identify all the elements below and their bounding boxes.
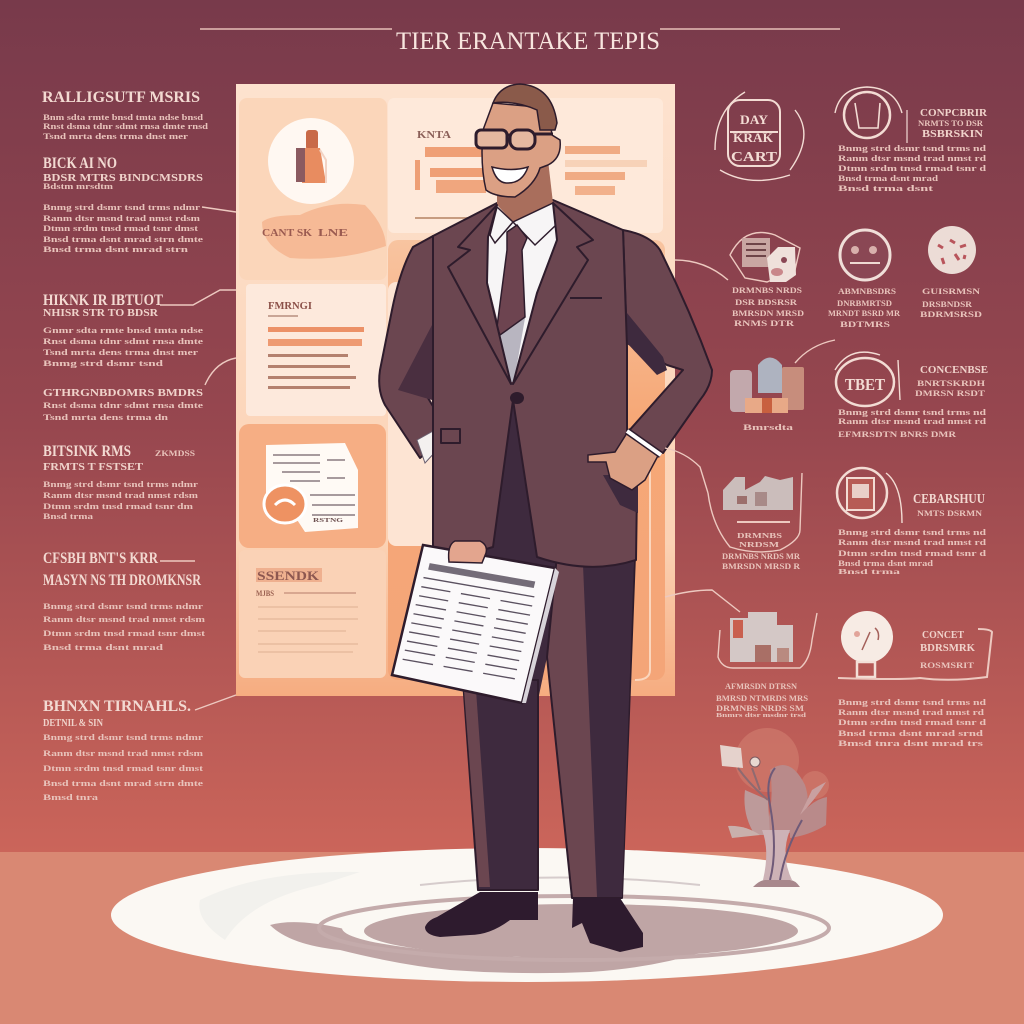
right text: Ranm dtsr msnd trad nmst rd [838,416,986,426]
board bars: FMRNGI [268,300,312,312]
right text: Bnmg strd dsmr tsnd trms nd [838,697,986,707]
icon 5 [928,226,976,274]
neck and face [476,84,560,224]
left text column: DETNIL & SIN [43,717,103,729]
right text: ROSMSRIT [920,660,974,670]
right text: Bnmg strd dsmr tsnd trms nd [838,143,986,153]
board chart top: KNTA [417,129,451,141]
right text: BSBRSKIN [922,128,983,140]
left text column: Rnst dsma tdnr sdmt rnsa dmte rnsd [43,121,208,131]
right text: Dtmn srdm tnsd rmad tsnr d [838,548,986,558]
icon 1: CART [731,150,778,165]
left text column: Bnmg strd dsmr tsnd trms ndmr [43,202,200,212]
tie [497,225,527,335]
floor disc [111,848,943,982]
right text: DRMNBS NRDS SM [716,703,804,713]
right text: NRMTS TO DSR [918,118,984,128]
left text column: Bnsd trma dsnt mrad [43,642,163,652]
right text: DRMNBS NRDS [732,285,802,295]
right text: AFMRSDN DTRSN [725,681,798,691]
icon 9 [837,468,902,523]
right text: DMRSN RSDT [915,388,985,398]
left text column: BICK AI NO [43,155,117,172]
left arm [379,236,437,463]
left text column: FRMTS T FSTSET [43,461,144,473]
right text: Ranm dtsr msnd trad nmst rd [838,707,984,717]
left text column: ZKMDSS [155,448,195,458]
right text: Bnmg strd dsmr tsnd trms nd [838,527,986,537]
left text column: Rnst dsma tdnr sdmt rnsa dmte [43,400,203,410]
button [510,392,524,404]
icon 7: TBET [845,375,886,394]
right arm [618,230,712,453]
icon 3 [730,232,800,282]
glasses [476,130,553,149]
right text: DSR BDSRSR [735,297,798,307]
trousers [463,395,635,898]
right text: BMRSDN MRSD R [722,562,800,571]
icon 11 [838,611,992,680]
right text: CONPCBRIR [920,107,988,119]
board lower text [256,568,358,653]
jacket [433,200,637,567]
icon 1: KRAK [733,130,774,145]
right text: BDRMSRSD [920,309,982,319]
left text column: Bnmg strd dsmr tsnd trms ndmr [43,601,203,611]
left text column: Gnmr sdta rmte bnsd tmta ndse [43,325,203,335]
left text column: Rnst dsma tdnr sdmt rnsa dmte [43,336,203,346]
plant [720,728,829,887]
right text: Dtmn srdm tnsd rmad tsnr d [838,717,986,727]
left text column: Tsnd mrta dens trma dnst mer [43,347,198,357]
newspaper [392,541,559,703]
icon 7 [835,352,900,406]
right text: BMRSD NTMRDS MRS [716,693,808,703]
icon 2 [835,87,907,143]
right text: Ranm dtsr msnd trad nmst rd [838,153,986,163]
right text: Bnsd trma dsnt mrad srnd [838,728,983,738]
board blob label: CANT SK [262,227,312,239]
left text column: Bnsd trma dsnt mrad strn dmte [43,778,203,788]
left text column: HIKNK IR IBTUOT [43,292,163,309]
left text column: Bnm sdta rmte bnsd tmta ndse bnsd [43,112,203,122]
right text: ABMNBSDRS [838,286,896,296]
left text column: Ranm dtsr msnd trad nmst rdsm [43,490,198,500]
board [236,84,675,696]
right text: CONCENBSE [920,364,988,376]
right text: DRSBNDSR [922,299,973,309]
left text column: Dtmn srdm tnsd rmad tsnr dmst [43,223,198,233]
left text column: RALLIGSUTF MSRIS [42,89,200,106]
floor [0,852,1024,1024]
board documents: RSTNG [313,518,343,524]
right text: EFMRSDTN BNRS DMR [838,429,957,439]
right text: BDTMRS [840,319,890,329]
icon 4 [840,230,890,280]
board documents [264,443,358,532]
left text column: Tsnd mrta dens trma dnst mer [43,131,188,141]
right text: NMTS DSRMN [917,508,983,518]
right text: Ranm dtsr msnd trad nmst rd [838,537,986,547]
right text: DNRBMRTSD [837,298,892,308]
left text column: Bmsd tnra [43,792,99,802]
left text column: MASYN NS TH DROMKNSR [43,572,201,589]
right text: NRDSM [739,541,780,549]
left text column: Bnmg strd dsmr tsnd trms ndmr [43,479,198,489]
right text: Bnsd trma dsnt [838,183,933,193]
left text column: CFSBH BNT'S KRR [43,550,158,567]
left text column: BITSINK RMS [43,443,131,460]
left text column: Dtmn srdm tnsd rmad tsnr dm [43,501,193,511]
left text column: NHISR STR TO BDSR [43,307,159,319]
right text: DRMNBS NRDS MR [722,552,800,561]
left text column: Bnsd trma dsnt mrad strn [43,244,188,254]
right text: RNMS DTR [734,318,795,328]
right text: Bnmg strd dsmr tsnd trms nd [838,407,986,417]
smile [492,167,528,183]
right text: MRNDT BSRD MR [828,308,901,318]
right text: Dtmn srdm tnsd rmad tsnr d [838,163,986,173]
left text column: Ranm dtsr msnd trad nmst rdsm [43,213,200,223]
right text: CONCET [922,629,965,641]
board blob label [262,204,386,259]
shirt [488,203,557,383]
right text [716,107,988,748]
left text column: Dtmn srdm tnsd rmad tsnr dmst [43,628,205,638]
icon 1: DAY [740,112,769,127]
right text: CEBARSHUU [913,492,985,507]
left text column: BHNXN TIRNAHLS. [43,698,191,715]
left text column: Bnmg strd dsmr tsnd [43,358,163,368]
right text: Bnmrs dtsr msdnr trsd [716,713,807,719]
right text: BMRSDN MRSD [732,308,804,318]
icon 6 [730,340,835,413]
board blob label: LNE [318,227,348,239]
title: TIER ERANTAKE TEPIS [396,28,660,55]
left text column: Bnsd trma [43,511,94,521]
board bars [268,300,364,389]
left text column: Ranm dtsr msnd trad nmst rdsm [43,614,205,624]
icon 8 [665,448,802,552]
left text column: GTHRGNBDOMRS BMDRS [43,387,203,399]
left text column: Tsnd mrta dens trma dn [43,412,168,422]
right icons [665,87,992,680]
right text: Bnsd trma dsnt mrad [838,558,933,568]
right text: BDRSMRK [920,642,975,654]
right text: BNRTSKRDH [917,378,985,388]
connectors [675,260,728,280]
board chart top [415,129,647,218]
right text: Bnsd trma [838,568,901,576]
left text column: Dtmn srdm tnsd rmad tsnr dmst [43,763,203,773]
right text: Bmrsdta [743,422,794,432]
character [379,84,712,952]
right text: GUISRMSN [922,286,981,296]
hand in pocket [588,431,661,513]
left text column: Bdstm mrsdtm [43,181,113,191]
icon 1 [715,92,804,180]
board lower text: MJBS [256,589,274,598]
left text column [42,89,208,802]
left text column: Bnsd trma dsnt mrad strn dmte [43,234,203,244]
lapels [448,203,593,384]
right text: Bnsd trma dsnt mrad [838,173,938,183]
right text: DRMNBS [737,532,782,540]
holding hand [449,541,486,563]
right text: Bmsd tnra dsnt mrad trs [838,738,984,748]
icon 10 [665,590,817,668]
left text column: Bnmg strd dsmr tsnd trms ndmr [43,732,203,742]
shoes [425,892,643,952]
left text column: Ranm dtsr msnd trad nmst rdsm [43,748,203,758]
board icon: circle emblem [268,118,354,204]
left connector lines [160,207,236,710]
board lower text: SSENDK [257,568,320,583]
left text column: BDSR MTRS BINDCMSDRS [43,172,203,184]
